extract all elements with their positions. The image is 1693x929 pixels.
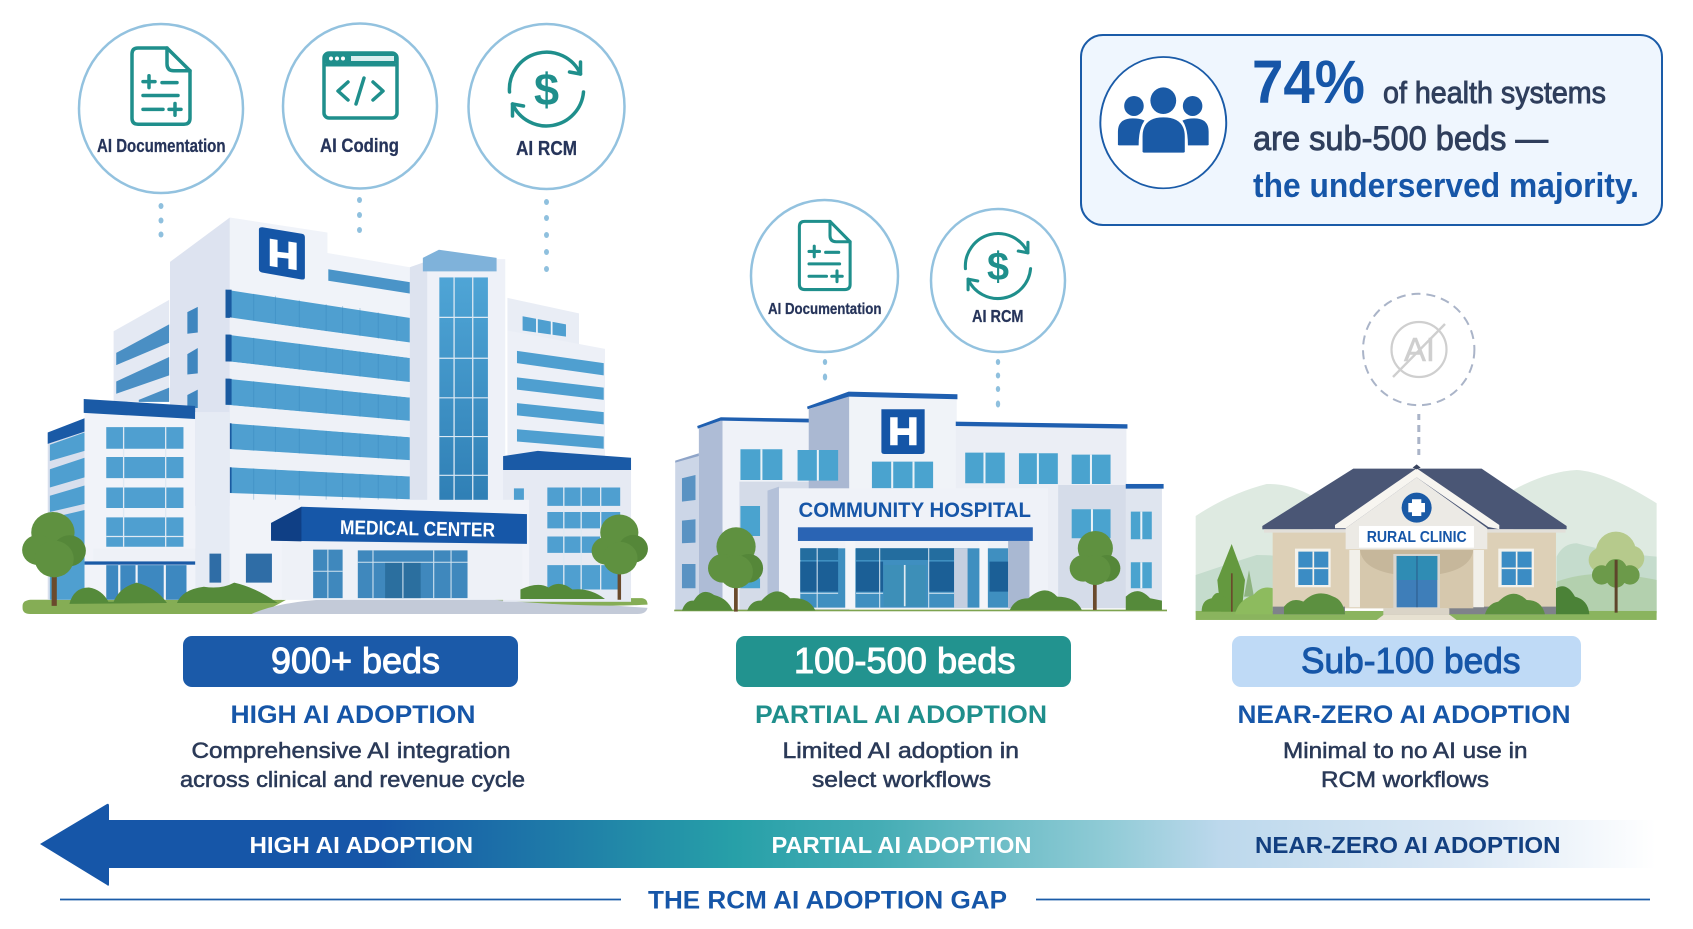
connector dots: AI RCM mid [996, 359, 1000, 408]
no-AI icon bubble [1363, 294, 1474, 405]
tier column: 100-500 beds [736, 636, 1071, 792]
tier column: 900+ beds [180, 636, 525, 792]
description: partial adoption: Limited AI adoption in [782, 738, 1019, 763]
description: partial adoption: select workflows [812, 767, 991, 792]
description: near-zero adoption: RCM workflows [1321, 767, 1489, 792]
connector dots: AI Documentation mid [823, 359, 827, 380]
label: AI Documentation: AI Documentation [97, 135, 226, 156]
label: AI RCM: AI RCM [516, 138, 577, 160]
arrow label: NEAR-ZERO AI ADOPTION: NEAR-ZERO AI ADOPTION [1255, 832, 1560, 858]
icon bubble: AI RCM (mid tier) [931, 209, 1065, 352]
stat text: of health systems: of health systems [1383, 75, 1606, 110]
icon: revenue cycle dollar: $ [987, 245, 1009, 289]
gradient arrow: adoption spectrum [40, 804, 1656, 886]
icon: document [132, 48, 190, 124]
stat text: are sub-500 beds: are sub-500 beds — [1253, 120, 1548, 158]
icon bubble: AI RCM [468, 24, 624, 189]
illustration: rural clinic with hills [1196, 464, 1657, 620]
description: near-zero adoption: Minimal to no AI use in [1283, 738, 1528, 763]
badge: Sub-100 beds: Sub-100 beds [1301, 640, 1520, 681]
icon: revenue cycle dollar [509, 52, 584, 126]
icon bubble: AI Documentation (large tier) [79, 24, 243, 193]
stat callout panel: 74% of health systems [1081, 35, 1662, 225]
description: near-zero adoption [1283, 738, 1528, 792]
connector dots: AI RCM [544, 199, 549, 272]
label: AI Documentation: AI Documentation [768, 301, 882, 318]
heading: PARTIAL AI ADOPTION: PARTIAL AI ADOPTION [755, 701, 1047, 729]
icon: code window [324, 53, 397, 118]
icon: group of people in circle [1100, 57, 1226, 188]
connector dots: AI Coding [357, 197, 362, 233]
arrow label: PARTIAL AI ADOPTION: PARTIAL AI ADOPTION [772, 832, 1032, 858]
illustration: community hospital building [674, 392, 1167, 612]
description: high adoption: across clinical and revenue cycle [180, 767, 525, 792]
sign: RURAL CLINIC: RURAL CLINIC [1367, 529, 1467, 546]
icon bubble: AI Coding [283, 24, 437, 188]
badge: 900+ beds [183, 636, 518, 687]
icon: revenue cycle dollar: $ [534, 64, 559, 115]
heading: NEAR-ZERO AI ADOPTION: NEAR-ZERO AI ADOPTION [1238, 701, 1570, 729]
badge: 900+ beds: 900+ beds [271, 640, 440, 681]
connector dots: AI Documentation [158, 203, 164, 238]
icon: document [799, 221, 850, 290]
arrow label: HIGH AI ADOPTION: HIGH AI ADOPTION [250, 832, 473, 858]
icon: AI crossed out: AI [1404, 331, 1435, 368]
sign: COMMUNITY HOSPITAL: COMMUNITY HOSPITAL [798, 498, 1031, 522]
description: high adoption: Comprehensive AI integration [192, 738, 510, 763]
tier column: Sub-100 beds [1232, 636, 1581, 792]
heading: HIGH AI ADOPTION: HIGH AI ADOPTION [230, 701, 476, 729]
icon: revenue cycle dollar [965, 234, 1031, 299]
footer title: THE RCM AI ADOPTION GAP: THE RCM AI ADOPTION GAP [648, 886, 1007, 914]
connector: dashed line to rural clinic [1417, 414, 1420, 455]
badge: Sub-100 beds [1232, 636, 1581, 687]
stat number: 74%: 74% [1252, 48, 1365, 116]
label: AI RCM: AI RCM [972, 306, 1024, 326]
sign: MEDICAL CENTER: MEDICAL CENTER [340, 517, 496, 542]
stat text: the underserved majority: the underserved majority. [1253, 167, 1639, 205]
illustration: large medical center building [22, 217, 648, 614]
label: AI Coding: AI Coding [320, 136, 399, 157]
icon bubble: AI Documentation (mid tier) [751, 200, 898, 352]
description: partial adoption [782, 738, 1019, 792]
description: high adoption [180, 738, 525, 792]
badge: 100-500 beds [736, 636, 1071, 687]
badge: 100-500 beds: 100-500 beds [794, 640, 1016, 681]
